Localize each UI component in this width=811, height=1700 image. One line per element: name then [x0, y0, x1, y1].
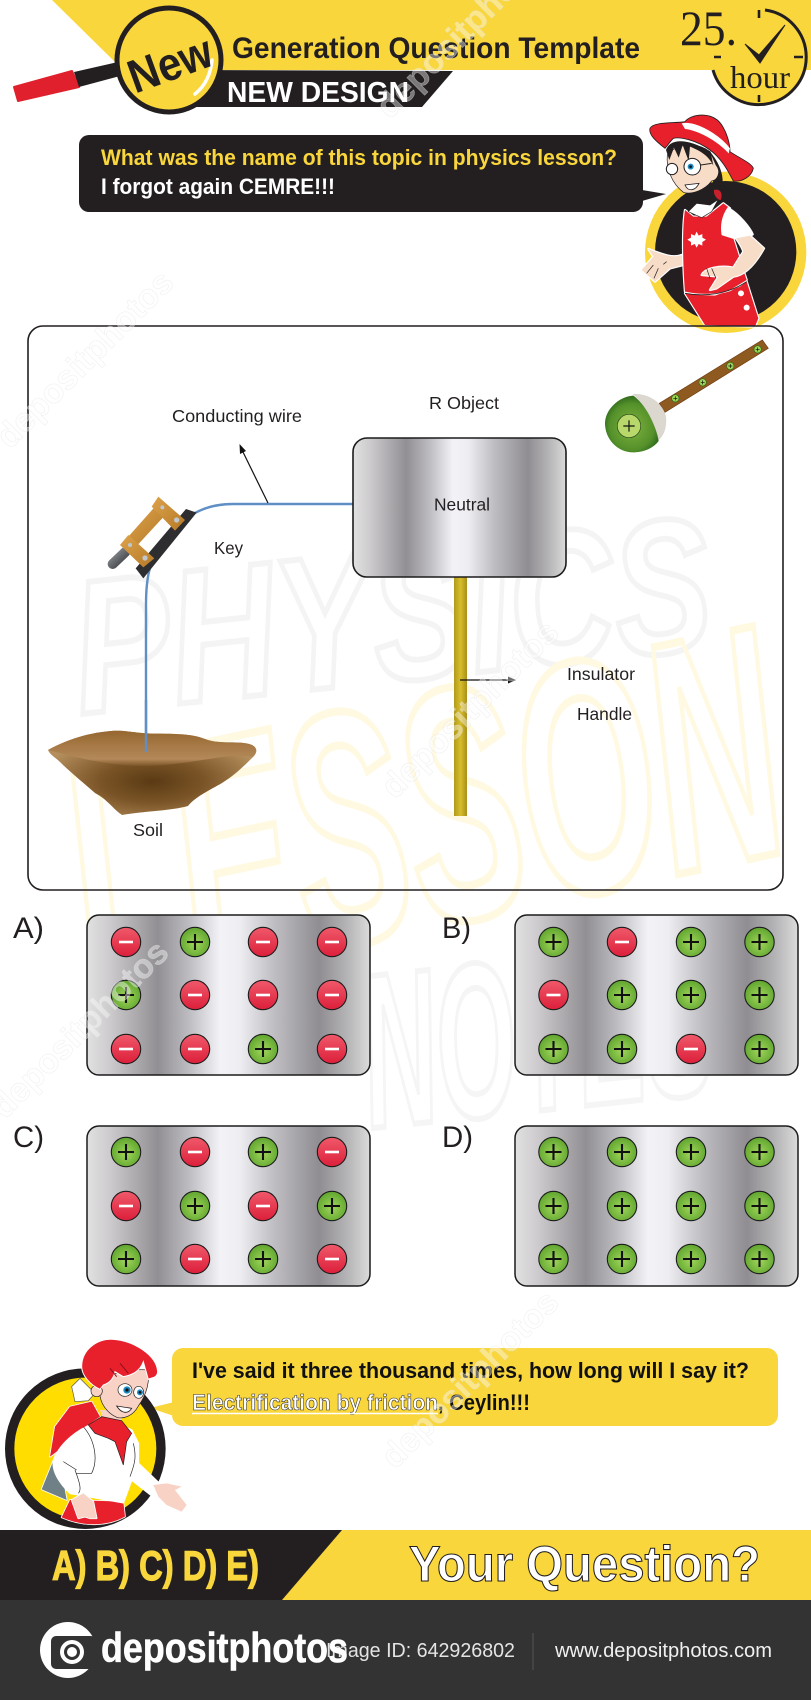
speech bubble: Cemre: What was the name of this topic in physics lesson? [101, 145, 617, 170]
footer bar [0, 1600, 811, 1700]
clock icon: 25. hour: hour [730, 59, 790, 95]
header title: Generation Question Template [232, 32, 640, 65]
header banner [52, 0, 811, 109]
subtitle band [190, 70, 453, 109]
character: Cemre with red hat [642, 115, 806, 333]
label: Insulator: Insulator [567, 664, 635, 684]
option D plate [515, 1126, 798, 1286]
bottom band: Your Question?: Your Question? [409, 1536, 760, 1592]
footer: image id: Image ID: 642926802 [326, 1640, 515, 1662]
label: Conducting wire: Conducting wire [172, 406, 302, 426]
bottom band: answer choices: A) B) C) D) E) [52, 1542, 259, 1589]
speech bubble: Cemre: I forgot again CEMRE!!! [101, 174, 335, 199]
conducting wire [146, 504, 353, 752]
magnifier icon with New [14, 8, 221, 112]
label: Soil: Soil [133, 820, 163, 840]
positive charged ball on rod [605, 340, 768, 452]
clock icon: 25. hour [680, 0, 806, 105]
arrow: to conducting wire label [240, 444, 268, 503]
speech bubble: Ceylin [150, 1348, 778, 1426]
stock watermarks: depositphotos [374, 1283, 566, 1476]
subtitle band: NEW DESIGN [227, 77, 409, 109]
magnifier icon with New: New [120, 24, 220, 103]
soil [48, 700, 256, 815]
speech bubble: Ceylin: I've said it three thousand times, how long will I say it? [192, 1358, 749, 1383]
key switch [113, 497, 197, 578]
speech bubble: Ceylin: , Ceylin!!! [438, 1390, 530, 1415]
stock watermarks [0, 0, 566, 1476]
label: B): B) [442, 912, 471, 945]
option B plate [515, 915, 798, 1075]
option C plate [87, 1126, 370, 1286]
label: Key: Key [214, 538, 243, 558]
footer: depositphotos wordmark: depositphotos [101, 1624, 348, 1671]
footer: url: www.depositphotos.com [554, 1640, 772, 1662]
option A plate [87, 915, 370, 1075]
insulator handle rod [454, 577, 467, 816]
footer: camera logo [40, 1622, 96, 1678]
label: Handle: Handle [577, 704, 632, 724]
clock icon: 25. hour: 25. [680, 0, 737, 56]
label: D): D) [442, 1121, 473, 1154]
bottom band: answer choices [0, 1530, 811, 1600]
footer: divider [532, 1633, 534, 1670]
speech bubble: Cemre [79, 135, 666, 212]
label: Neutral: Neutral [434, 494, 490, 514]
label: R Object: R Object [429, 393, 499, 413]
arrow: to insulator label [460, 676, 516, 684]
label: A): A) [13, 912, 44, 945]
speech bubble: Ceylin: Electrification by friction [192, 1390, 438, 1415]
panel: diagram frame [28, 326, 783, 890]
stock watermarks: depositphotos [374, 613, 566, 806]
character: Ceylin with red hair [10, 1339, 187, 1524]
metal object R [353, 438, 566, 577]
label: C): C) [13, 1121, 44, 1154]
